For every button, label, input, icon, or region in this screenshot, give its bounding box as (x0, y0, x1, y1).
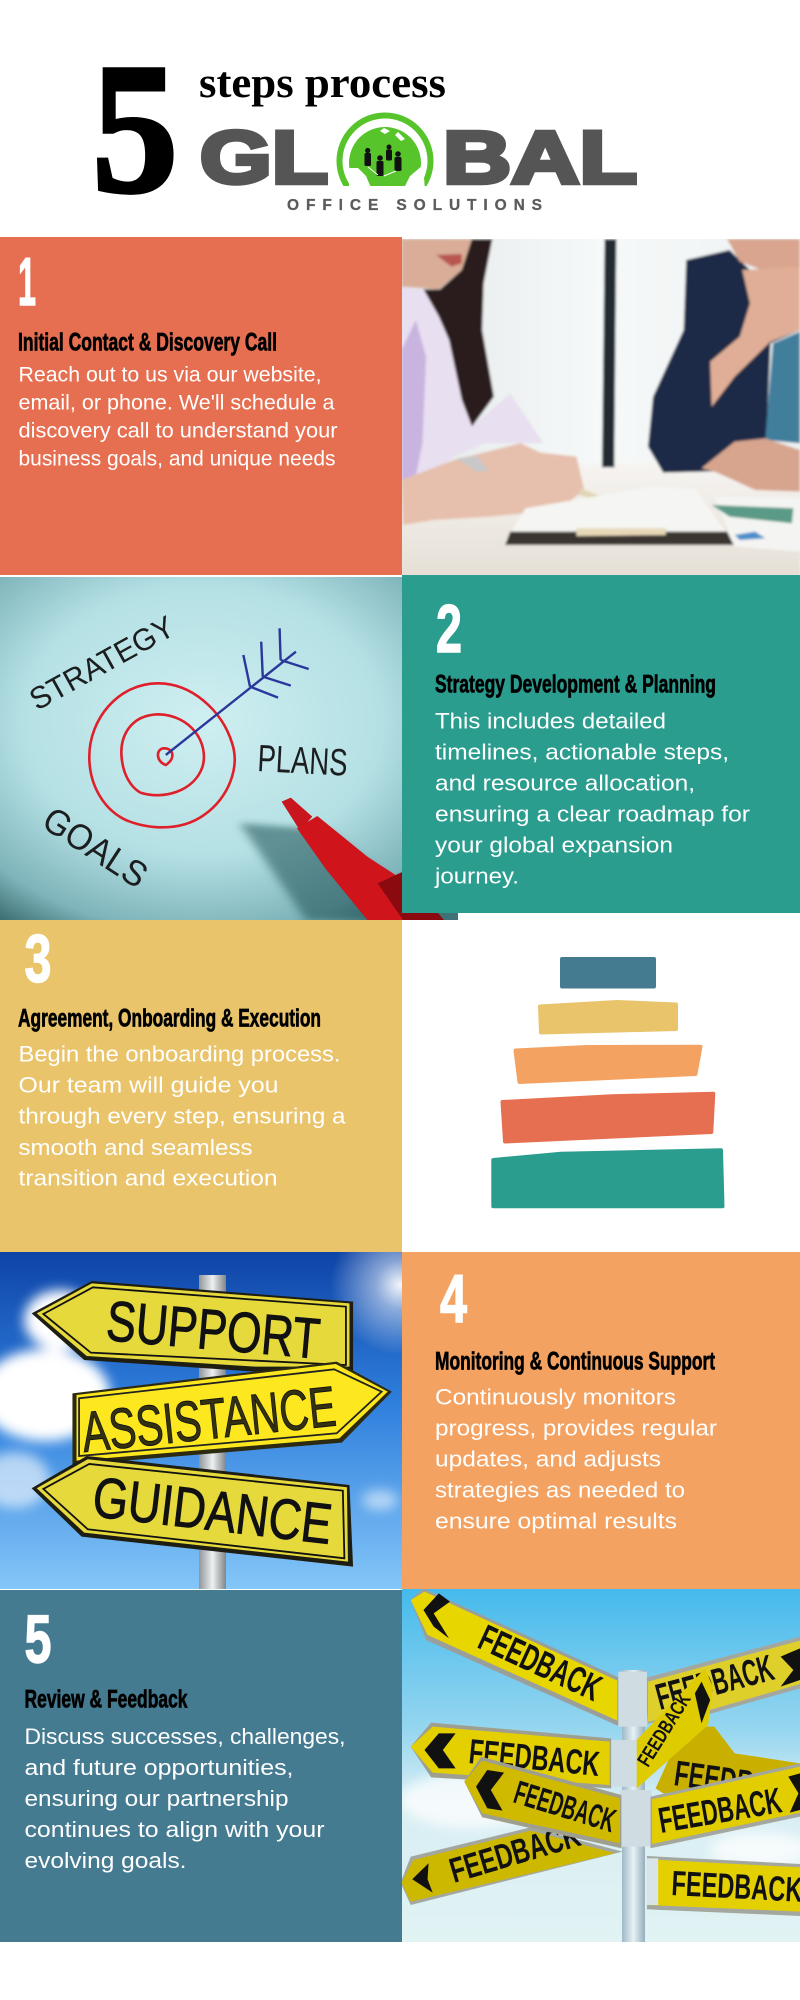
sign: top left (411, 1588, 618, 1726)
step 1 body text: discovery call to understand your (18, 420, 337, 442)
header (96, 67, 637, 210)
step 2 body text: ensuring a clear roadmap for (435, 802, 750, 826)
step 3 heading: Agreement, Onboarding & Execution (18, 1004, 321, 1032)
step 1 heading: Initial Contact & Discovery Call (18, 328, 277, 356)
logo letters BAL: BAL (443, 116, 637, 199)
handwritten word: goals: GOALS (36, 798, 155, 896)
step 5 body text: Discuss successes, challenges, (24, 1724, 346, 1749)
panel: step 3 (0, 920, 402, 1252)
step number 3: 3 (24, 920, 52, 996)
step 3 body text: smooth and seamless (18, 1135, 252, 1160)
sign: assistance: ASSISTANCE (79, 1375, 339, 1465)
sign: middle left (411, 1723, 611, 1788)
panel: step 5 (0, 1590, 402, 1942)
step 3 body text: Begin the onboarding process. (18, 1042, 340, 1067)
title: steps process: steps process (199, 60, 446, 107)
step 2 body text: your global expansion (435, 833, 673, 858)
step 3 body text: through every step, ensuring a (18, 1104, 346, 1129)
pyramid bar: teal (493, 1150, 722, 1206)
red target spiral (89, 683, 235, 827)
step 4 body text: Continuously monitors (435, 1384, 676, 1409)
step 3 body text: transition and execution (18, 1166, 278, 1191)
step 5 heading: Review & Feedback (24, 1685, 188, 1713)
sign: bottom left: FEEDBACK (445, 1815, 585, 1891)
step 1 body text: Reach out to us via our website, (18, 364, 322, 386)
logo tagline: OFFICE SOLUTIONS (287, 197, 542, 214)
signpost pole (199, 1275, 226, 1589)
blue arrow (166, 628, 309, 755)
step 4 body text (435, 1384, 717, 1533)
sign: bottom left (402, 1828, 622, 1905)
step 2 body text: This includes detailed (435, 708, 666, 733)
step 5 body text: ensuring our partnership (24, 1786, 288, 1811)
step number 5: 5 (24, 1602, 52, 1678)
photo: feedback signpost (400, 1588, 800, 1942)
sign: front left (464, 1757, 621, 1848)
pole brackets (611, 1672, 652, 1847)
sign: guidance: GUIDANCE (89, 1465, 335, 1557)
big numeral 5: 5 (92, 26, 178, 232)
sign: front left: FEEDBACK (510, 1773, 620, 1839)
step 3 body text (18, 1042, 346, 1191)
signpost pole (622, 1670, 645, 1942)
panel: step 1: 1 (18, 244, 36, 320)
sign: middle back right (656, 1726, 800, 1794)
sign: support (32, 1281, 353, 1372)
step 4 body text: ensure optimal results (435, 1508, 677, 1533)
step 3 body text: Our team will guide you (18, 1073, 278, 1098)
step 1 body text: email, or phone. We'll schedule a (18, 392, 335, 414)
handwritten word: plans: PLANS (257, 738, 349, 785)
step 1 body text (18, 364, 337, 470)
step 4 body text: updates, and adjusts (435, 1446, 661, 1471)
red marker (240, 798, 444, 920)
step number 2: 2 (436, 591, 462, 667)
step 2 body text: timelines, actionable steps, (435, 739, 729, 764)
step number 4: 4 (440, 1261, 467, 1337)
photo: business meeting (395, 232, 800, 582)
sign: support: SUPPORT (104, 1289, 323, 1372)
sign: guidance (32, 1456, 353, 1567)
pyramid bar: coral (502, 1094, 713, 1142)
sign: small angled: FEEDBACK (634, 1689, 696, 1771)
step 5 body text: evolving goals. (24, 1848, 186, 1873)
pyramid of stacked bars (493, 959, 722, 1206)
logo globe icon (336, 112, 434, 186)
sign: middle left: FEEDBACK (467, 1732, 601, 1784)
step 5 body text: and future opportunities, (24, 1755, 294, 1780)
step 2 body text (434, 708, 750, 889)
handwritten word: strategy: STRATEGY (23, 609, 180, 717)
step 2 body text: and resource allocation, (435, 770, 695, 795)
step 4 body text: strategies as needed to (435, 1477, 685, 1502)
step 4 body text: progress, provides regular (435, 1415, 717, 1440)
step 2 body text: journey. (434, 864, 519, 889)
logo letters GL: GL (200, 116, 328, 199)
sign: bottom right (647, 1856, 800, 1916)
panel: step 2 (402, 575, 800, 913)
step 5 body text: continues to align with your (24, 1817, 324, 1842)
pyramid bar: sand (516, 1047, 700, 1082)
photo: support signpost (0, 1215, 470, 1589)
pyramid bar: yellow (540, 1002, 676, 1032)
logo: Global Office Solutions (200, 116, 637, 214)
photo: strategy target (0, 577, 458, 920)
panel: step 1 (0, 237, 402, 575)
panel: step 4 (402, 1252, 800, 1589)
step 5 body text (24, 1724, 346, 1873)
pyramid bar: blue (562, 959, 654, 986)
step 1 body text: business goals, and unique needs (18, 448, 336, 470)
sign: top left: FEEDBACK (473, 1617, 608, 1709)
